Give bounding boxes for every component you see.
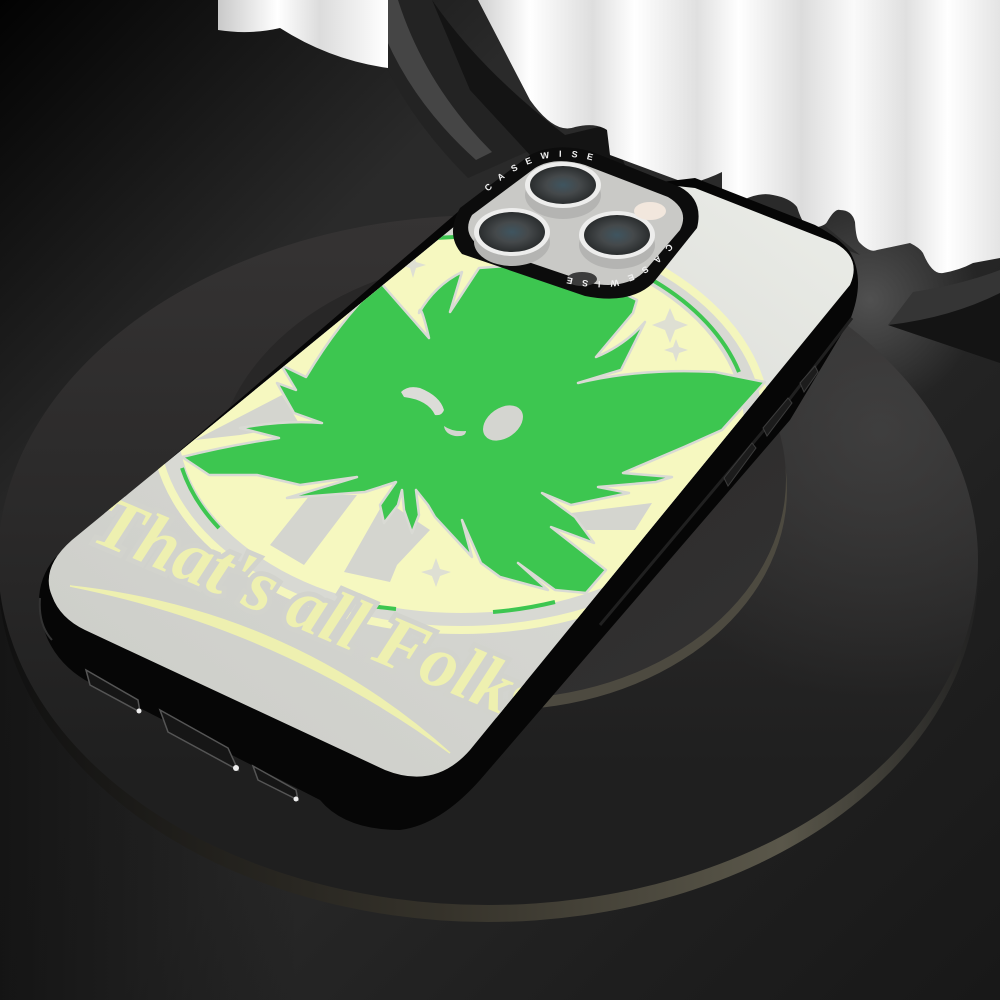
case bottom ports xyxy=(86,670,298,802)
black arch stand xyxy=(362,0,860,255)
right eye xyxy=(483,405,523,441)
lenses xyxy=(525,162,601,208)
camera module xyxy=(452,148,699,299)
printed back surface xyxy=(49,170,854,777)
brand text bottom: CASEWISE xyxy=(566,244,672,288)
swoosh xyxy=(70,586,450,753)
slogan: That's all Folks xyxy=(83,480,553,741)
badge outer ring xyxy=(155,220,767,630)
grey stripes xyxy=(195,395,652,582)
mouth xyxy=(444,426,466,436)
side buttons xyxy=(724,366,818,486)
curtain right xyxy=(478,0,1000,273)
left eye xyxy=(401,387,444,415)
curtain left xyxy=(218,0,388,68)
large disc platform xyxy=(0,215,978,922)
flash xyxy=(634,202,666,220)
right wedge stand xyxy=(888,270,1000,363)
badge green arcs xyxy=(182,237,739,612)
artwork xyxy=(70,220,767,753)
brand text top: CASEWISE xyxy=(485,150,594,190)
microphone xyxy=(567,272,597,286)
small disc riser xyxy=(213,259,787,710)
green leaf character xyxy=(182,262,765,593)
badge circle xyxy=(178,237,744,613)
phone case shell xyxy=(39,178,858,830)
stars xyxy=(400,252,688,587)
lens barrels xyxy=(525,171,601,219)
